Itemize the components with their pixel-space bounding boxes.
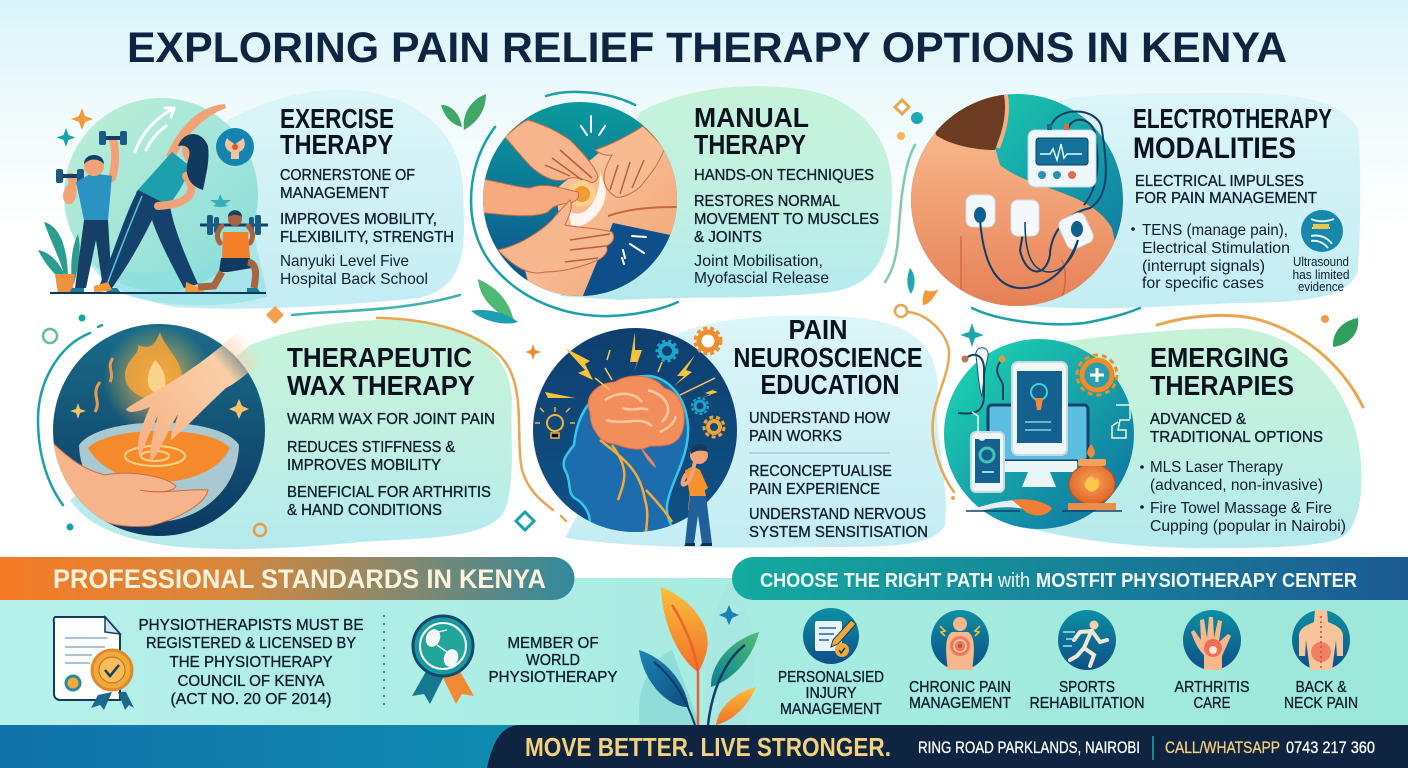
label	[1284, 679, 1358, 712]
heading: THERAPEUTIC	[287, 342, 472, 373]
text: key points: TRADITIONAL OPTIONS	[1150, 429, 1323, 446]
text: registration requirement	[138, 617, 364, 708]
label: SPORTS	[1059, 679, 1115, 696]
text: key points	[694, 167, 879, 287]
panel: manual therapy	[478, 86, 892, 310]
bullet list: TENS (manage pain),	[1142, 222, 1288, 239]
service: back and neck pain	[1284, 610, 1358, 712]
footer band	[0, 725, 1408, 768]
heading: THERAPY	[694, 129, 806, 160]
label: MANAGEMENT	[780, 701, 882, 718]
panel background blob	[560, 86, 892, 300]
caption: ultrasound: evidence	[1298, 280, 1344, 294]
text: key points: IMPROVES MOBILITY	[287, 457, 441, 474]
heading: MANUAL	[694, 102, 809, 133]
text: key points: REDUCES STIFFNESS &	[287, 439, 455, 456]
heading: ELECTROTHERAPY	[1133, 103, 1332, 134]
text: key points: UNDERSTAND NERVOUS	[749, 506, 926, 523]
label	[909, 679, 1011, 712]
address: RING ROAD PARKLANDS, NAIROBI	[918, 738, 1140, 757]
text: key points: MANAGEMENT	[280, 185, 389, 202]
caption: ultrasound: Ultrasound	[1293, 255, 1349, 269]
text: key points: SYSTEM SENSITISATION	[749, 524, 928, 541]
bullet list: Fire Towel Massage & Fire	[1150, 500, 1332, 517]
bullet list: for specific cases	[1142, 275, 1264, 292]
service: arthritis care	[1174, 610, 1250, 712]
heading pill: PROFESSIONAL STANDARDS IN KENYA	[53, 564, 546, 594]
heading	[280, 103, 394, 160]
illustration: hand in wax bowl	[38, 314, 272, 536]
text: key points: HANDS-ON TECHNIQUES	[694, 167, 874, 184]
icon: hand with inflamed joint	[1183, 610, 1241, 670]
illustration: plant leaves	[639, 580, 759, 725]
bullet list: Cupping (popular in Nairobi)	[1150, 518, 1346, 535]
text: key points	[1150, 411, 1323, 446]
panel: therapeutic wax therapy	[38, 314, 512, 549]
text: key points: & HAND CONDITIONS	[287, 502, 442, 519]
service: sports rehabilitation	[1030, 610, 1144, 712]
caption: ultrasound: has limited	[1292, 268, 1350, 282]
service: personalised injury management	[778, 608, 884, 718]
text: registration requirement: REGISTERED & LICENSED BY	[146, 635, 356, 652]
label: PERSONALSIED	[778, 669, 884, 686]
heading pill: MOSTFIT PHYSIOTHERAPY CENTER	[1036, 570, 1358, 592]
illustration: people exercising	[38, 98, 268, 305]
text: key points: Hospital Back School	[280, 271, 428, 288]
label: INJURY	[806, 685, 857, 702]
icon: back with spine	[1292, 610, 1350, 670]
icon: ultrasound	[1301, 210, 1343, 252]
text: key points: & JOINTS	[694, 229, 762, 246]
bullet list: (interrupt signals)	[1142, 258, 1265, 275]
tagline: MOVE BETTER. LIVE STRONGER.	[525, 732, 891, 762]
text: registration requirement: PHYSIOTHERAPISTS MUST BE	[138, 617, 364, 634]
panel background blob	[70, 320, 512, 549]
caption: ultrasound	[1292, 255, 1350, 294]
heading	[1150, 342, 1294, 401]
heading: NEUROSCIENCE	[734, 342, 922, 373]
text: key points	[287, 411, 495, 519]
heading	[694, 102, 809, 160]
icon: torso with pain target	[931, 610, 989, 670]
text: key points	[1135, 173, 1317, 207]
heading: PAIN	[788, 314, 848, 345]
panel: exercise therapy	[38, 90, 464, 309]
bottom band background	[0, 578, 1408, 726]
illustration: TENS device on shoulder	[905, 90, 1130, 310]
text: registration requirement: COUNCIL OF KENYA	[178, 673, 325, 690]
label: CARE	[1194, 695, 1230, 712]
text: membership	[488, 635, 618, 686]
text: key points: ELECTRICAL IMPULSES	[1135, 173, 1304, 190]
heading pill	[0, 557, 574, 600]
icon: clipboard and pencil	[803, 608, 859, 664]
text: key points	[280, 167, 454, 288]
label	[778, 669, 884, 718]
panel: choose the right path	[732, 557, 1408, 718]
label: ARTHRITIS	[1174, 679, 1250, 696]
text: key points: Myofascial Release	[694, 270, 829, 287]
text: key points: Nanyuki Level Five	[280, 253, 409, 270]
panel: electrotherapy modalities	[905, 90, 1360, 310]
text: key points: Joint Mobilisation,	[694, 253, 823, 270]
panel: pain neuroscience education	[516, 314, 946, 548]
text: key points: IMPROVES MOBILITY,	[280, 211, 437, 228]
text: key points: ADVANCED &	[1150, 411, 1246, 428]
contact	[1165, 738, 1375, 757]
bullet list: MLS Laser Therapy	[1150, 459, 1283, 476]
text: key points: UNDERSTAND HOW	[749, 410, 891, 427]
heading: MODALITIES	[1133, 132, 1296, 165]
text: key points: RECONCEPTUALISE	[749, 463, 892, 480]
illustration: devices and fire cup	[944, 315, 1363, 529]
label: MANAGEMENT	[909, 695, 1011, 712]
label: NECK PAIN	[1284, 695, 1358, 712]
icon: world physiotherapy ribbon badge	[412, 616, 474, 704]
heading	[1133, 103, 1332, 165]
label: CHRONIC PAIN	[909, 679, 1011, 696]
bullet list	[1131, 222, 1290, 292]
label: BACK &	[1296, 679, 1347, 696]
label	[1174, 679, 1250, 712]
text: key points: CORNERSTONE OF	[280, 167, 415, 184]
text: membership: PHYSIOTHERAPY	[488, 669, 618, 686]
panel background blob	[1030, 93, 1360, 308]
text: registration requirement: THE PHYSIOTHERAPY	[170, 654, 333, 671]
service: chronic pain management	[909, 610, 1011, 712]
text: key points: MOVEMENT TO MUSCLES	[694, 211, 879, 228]
title: EXPLORING PAIN RELIEF THERAPY OPTIONS IN KENYA	[127, 24, 1287, 72]
heading	[287, 342, 475, 401]
panel: professional standards	[0, 557, 618, 710]
panel background blob	[105, 90, 464, 309]
text: membership: WORLD	[526, 652, 580, 669]
icon: certificate with seal	[54, 617, 134, 710]
panel background blob	[565, 316, 946, 548]
illustration: brain and head	[516, 328, 737, 546]
text: key points: WARM WAX FOR JOINT PAIN	[287, 411, 495, 428]
heading: EMERGING	[1150, 342, 1289, 373]
text: key points: RESTORES NORMAL	[694, 193, 840, 210]
panel background blob	[1000, 328, 1362, 548]
label	[1030, 679, 1144, 712]
heading pill	[732, 557, 1408, 600]
text: key points: PAIN WORKS	[749, 428, 842, 445]
text: key points: BENEFICIAL FOR ARTHRITIS	[287, 484, 491, 501]
heading: THERAPIES	[1150, 370, 1294, 401]
contact: CALL/WHATSAPP	[1165, 738, 1280, 757]
panel: emerging therapies	[944, 315, 1363, 548]
text: key points: FLEXIBILITY, STRENGTH	[280, 229, 454, 246]
bullet list: (advanced, non-invasive)	[1150, 477, 1323, 494]
heading	[734, 314, 922, 400]
text: key points: PAIN EXPERIENCE	[749, 481, 880, 498]
heading pill: CHOOSE THE RIGHT PATH	[760, 570, 993, 592]
text: key points: FOR PAIN MANAGEMENT	[1135, 190, 1317, 207]
contact: 0743 217 360	[1286, 738, 1375, 757]
text: membership: MEMBER OF	[508, 635, 599, 652]
text: key points	[749, 410, 928, 541]
heading: EDUCATION	[760, 369, 900, 400]
decoration: arcs, leaves and accents between panels	[266, 92, 1140, 521]
bullet list	[1140, 459, 1346, 535]
text: registration requirement: (ACT NO. 20 OF 2014)	[170, 691, 332, 708]
heading pill: with	[997, 570, 1030, 592]
label: REHABILITATION	[1030, 695, 1144, 712]
illustration: hands on knee	[483, 102, 677, 296]
heading: THERAPY	[280, 129, 393, 160]
icon: runner	[1058, 610, 1116, 670]
bullet list: Electrical Stimulation	[1142, 240, 1290, 257]
heading: EXERCISE	[280, 103, 394, 134]
heading: WAX THERAPY	[287, 370, 475, 401]
